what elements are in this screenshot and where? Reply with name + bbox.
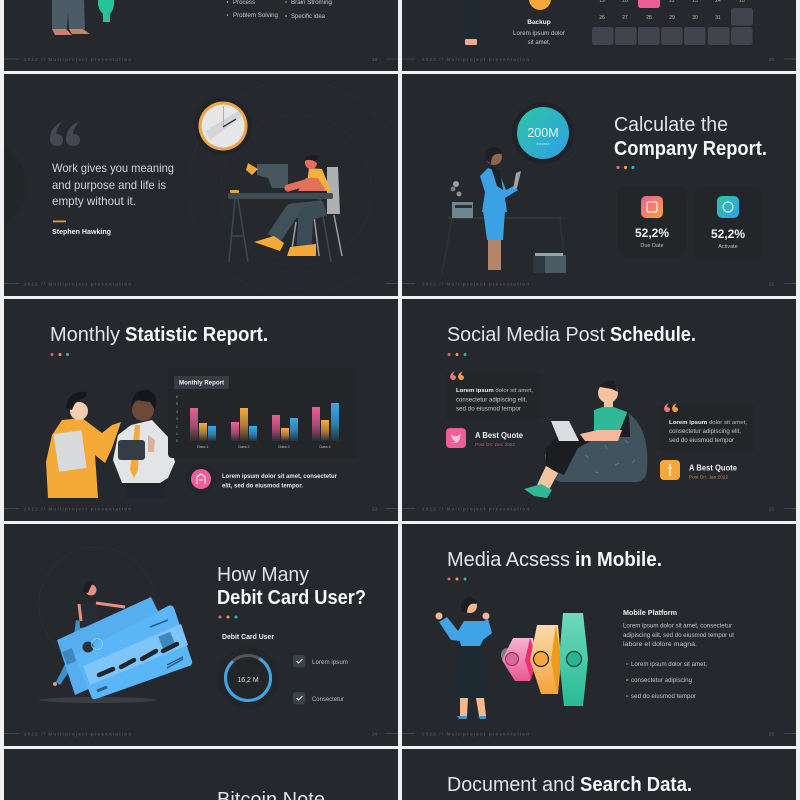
x axis labels: Data 1: [197, 445, 209, 449]
text block: mobile platform: Lorem ipsum dolor sit amet, consectetur: [623, 624, 732, 630]
quote card 1: Lorem ipsum dolor sit amet,: [456, 388, 533, 394]
title: Social Media Post: [447, 324, 605, 346]
footer: [402, 57, 796, 62]
illustration: woman presenting at table: [442, 147, 566, 274]
footer: [4, 506, 398, 512]
stat card: activate: 52,2%: [711, 227, 745, 241]
calendar: 28: [646, 15, 652, 21]
stat card: due date: Due Date: [640, 243, 664, 249]
footer: 23: [769, 506, 775, 512]
text block: mobile platform: Mobile Platform: [623, 610, 677, 617]
bullet list: process topics: [227, 0, 332, 20]
quote accent line: [53, 220, 66, 222]
bullet list: [626, 662, 707, 700]
footer: [402, 282, 796, 286]
footer: 2022 // Multiproject presentation: [24, 282, 131, 286]
x axis labels: Data 3: [278, 445, 290, 449]
quote card 1: sed do eiusmod tempor: [456, 406, 521, 412]
title: [50, 324, 268, 346]
illustration: standing person legs: [464, 0, 482, 45]
panel: slide 19 top left: [4, 0, 398, 71]
title: [614, 114, 767, 160]
stat card: activate: [693, 187, 763, 259]
chart note: [222, 474, 338, 490]
footer: [4, 732, 398, 736]
panel: social media post schedule: [402, 299, 796, 521]
quote text: and purpose and life is: [52, 178, 166, 192]
footer: 2022 // Multiproject presentation: [422, 732, 529, 736]
quote author 1: [446, 428, 524, 448]
bars: [190, 403, 339, 441]
footer: 2022 // Multiproject presentation: [422, 57, 529, 62]
footer: [402, 732, 796, 736]
backup block: Backup: [527, 19, 551, 26]
hexagon stack chart: [501, 613, 588, 706]
income badge: Income: [536, 141, 550, 146]
title: [447, 549, 662, 571]
y axis labels: 2: [176, 425, 178, 429]
text block: mobile platform: [623, 610, 734, 648]
bar chart panel: [168, 368, 358, 458]
quote author 2: [660, 460, 738, 480]
bullet list: process topics: Brain Stroming: [291, 0, 332, 6]
checklist: Lorem ipsum: [312, 660, 348, 666]
bullet list: process topics: Process: [233, 0, 255, 6]
donut chart: 16,2 M: [237, 677, 259, 684]
donut heading: Debit Card User: [222, 634, 274, 641]
chart heading: [174, 376, 229, 389]
title: [447, 324, 696, 346]
footer: 20: [769, 57, 775, 62]
title: Media Acsess: [447, 549, 570, 571]
footer: 19: [372, 57, 378, 62]
y axis labels: 1: [176, 432, 178, 436]
illustration: person working at desk: [228, 155, 342, 262]
illustration: legs and lightbulb: [52, 0, 114, 35]
quote author 2: Post On: Jan 2022: [689, 474, 729, 480]
text block: mobile platform: adipiscing elit, sed do eiusmod tempor ut: [623, 633, 734, 639]
quote author 2: A Best Quote: [689, 464, 738, 472]
donut chart: [217, 647, 279, 709]
title: in Mobile.: [575, 549, 662, 571]
footer: 2022 // Multiproject presentation: [24, 732, 131, 736]
x axis labels: [197, 445, 331, 449]
title dots: [218, 616, 238, 618]
stat card: due date: [617, 186, 687, 258]
panel: work quote slide: [0, 74, 404, 296]
x axis labels: Data 2: [238, 445, 250, 449]
y axis labels: 6: [176, 395, 178, 399]
panel: monthly statistic report: [4, 299, 398, 521]
title: Search Data.: [580, 774, 692, 796]
quote text: empty without it.: [52, 194, 136, 208]
backup block: sit amet,: [528, 40, 551, 46]
title: Company Report.: [614, 138, 767, 160]
quote card 1: consectetur adipiscing elit,: [456, 398, 527, 404]
icon: pink badge: [186, 464, 216, 494]
quote card 1: [446, 371, 542, 419]
quote text: [52, 161, 174, 208]
y axis labels: 3: [176, 417, 178, 421]
title: Debit Card User?: [217, 587, 366, 609]
icon: wall clock: [194, 97, 252, 155]
footer: 21: [769, 282, 775, 286]
title: Monthly: [50, 324, 120, 346]
icon: quote mark: [50, 121, 80, 146]
chart note: Lorem ipsum dolor sit amet, consectetur: [222, 474, 338, 480]
quote author 1: Post On: Dec 2022: [475, 442, 516, 447]
panel: media access in mobile: [402, 524, 796, 746]
income badge: [506, 96, 580, 170]
stat card: due date: 52,2%: [635, 226, 669, 240]
calendar: 26: [599, 15, 605, 21]
title: Document and: [447, 774, 575, 796]
title: Statistic Report.: [125, 324, 268, 346]
footer: [4, 57, 398, 62]
title: [447, 774, 692, 796]
footer: 24: [372, 732, 378, 736]
decorative ring: [39, 547, 155, 663]
y axis labels: 5: [176, 402, 178, 406]
y axis labels: 0: [176, 439, 178, 443]
title dots: [50, 353, 69, 356]
panel: bitcoin note: [4, 749, 398, 800]
panel: slide 20 top right: [402, 0, 796, 71]
backup block: [513, 0, 565, 46]
panel: company report slide: [402, 74, 796, 296]
footer: 22: [372, 506, 378, 512]
calendar: 29: [669, 15, 675, 21]
title dots: [616, 166, 635, 169]
footer: [402, 506, 796, 512]
footer: 2022 // Multiproject presentation: [24, 57, 131, 62]
calendar: 30: [692, 15, 698, 21]
bullet list: Lorem ipsum dolor sit amet,: [631, 662, 707, 668]
bullet list: consectetur adipiscing: [631, 678, 692, 684]
chart note: elit, sed do eiusmod tempor.: [222, 484, 303, 490]
footer: 2022 // Multiproject presentation: [422, 282, 529, 286]
panel: document and search data: [402, 749, 796, 800]
x axis labels: Data 4: [319, 445, 331, 449]
title: How Many: [217, 564, 309, 586]
quote author 1: A Best Quote: [475, 431, 524, 440]
calendar: 27: [622, 15, 628, 21]
title dots: [448, 578, 466, 580]
quote card 2: consectetur adipiscing elit,: [669, 429, 741, 435]
panel: debit card users: [4, 524, 398, 746]
income badge: 200M: [527, 126, 559, 140]
bullet list: process topics: Problem Solving: [233, 13, 278, 19]
bullet list: process topics: Specific idea: [291, 14, 326, 20]
checklist: [293, 655, 348, 704]
illustration: woman pushing debit cards: [39, 581, 192, 703]
footer: 2022 // Multiproject presentation: [24, 506, 131, 512]
backup block: Lorem ipsum dolor: [513, 31, 565, 37]
quote text: Work gives you meaning: [52, 161, 174, 175]
checklist: Consectetur: [312, 697, 344, 703]
calendar: 31: [715, 15, 721, 21]
calendar: [592, 0, 753, 45]
illustration: two colleagues talking: [46, 390, 175, 498]
quote author: Stephen Hawking: [52, 229, 111, 236]
quote card 2: [658, 403, 754, 451]
title: Schedule.: [610, 324, 696, 346]
title: [217, 564, 366, 609]
chart heading: Monthly Report: [179, 380, 224, 386]
quote card 2: sed do eiusmod tempor: [669, 438, 734, 444]
footer: 25: [769, 732, 775, 736]
footer: 2022 // Multiproject presentation: [422, 506, 529, 512]
decorative rings: [0, 80, 404, 296]
illustration: woman presenting: [436, 597, 492, 719]
y axis labels: 4: [176, 410, 178, 414]
title: Calculate the: [614, 114, 728, 136]
illustration: man on bean bag with laptop: [524, 381, 647, 498]
bullet list: sed do eiusmod tempor: [631, 694, 696, 700]
title dots: [448, 353, 466, 356]
quote card 2: Lorem ipsum dolor sit amet,: [669, 420, 747, 426]
stat card: activate: Activate: [718, 244, 738, 250]
y axis labels: [176, 395, 178, 443]
text block: mobile platform: labore et dolore magna.: [623, 642, 697, 648]
